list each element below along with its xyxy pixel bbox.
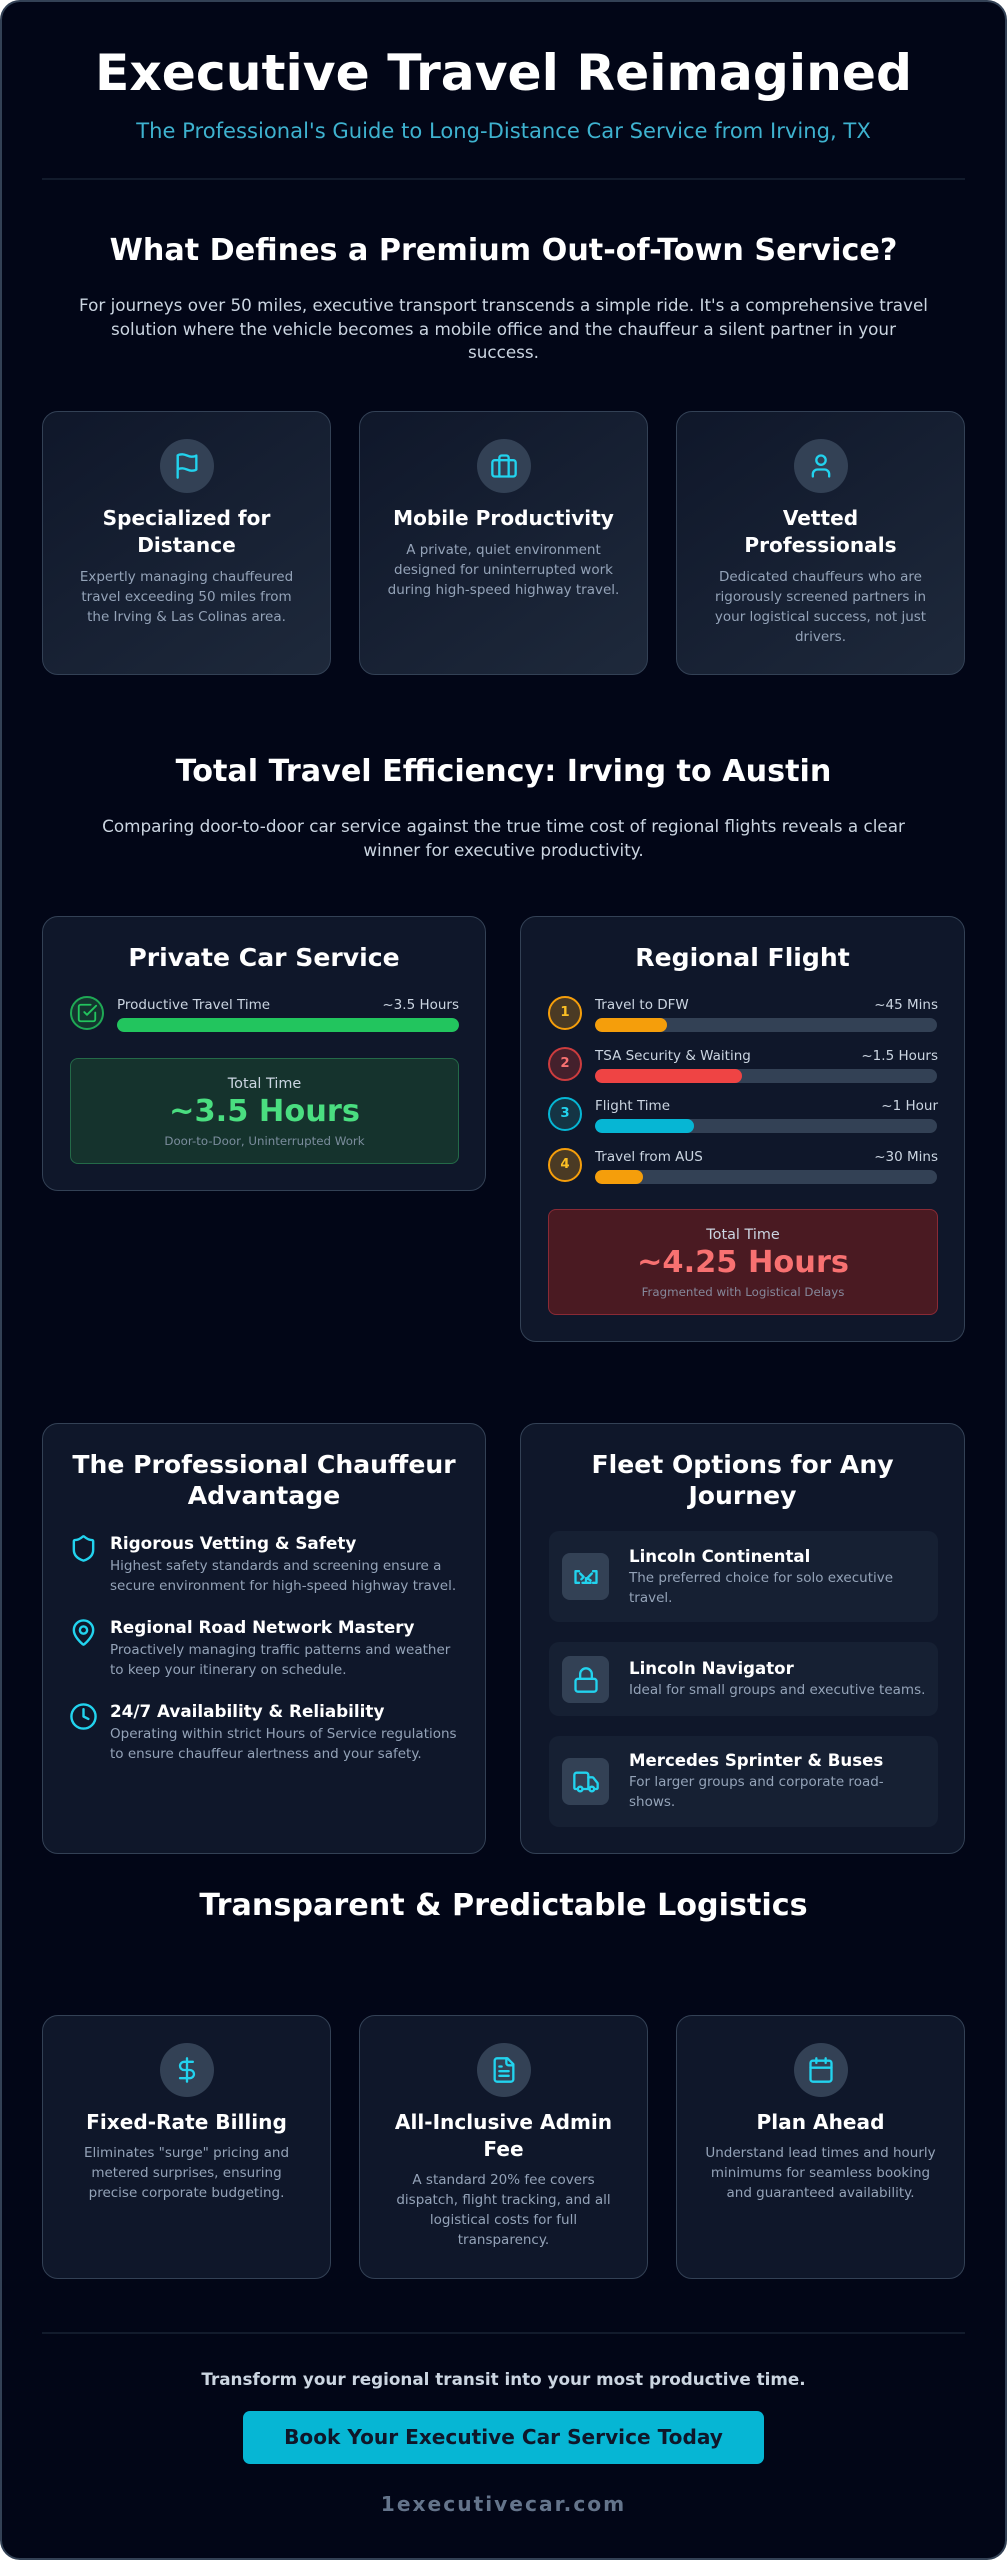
icon: dollar bbox=[160, 2043, 214, 2097]
card text bbox=[84, 2145, 289, 2201]
label: Productive Travel Time bbox=[117, 997, 270, 1013]
panel title bbox=[591, 1450, 894, 1510]
step 1 bbox=[548, 996, 582, 1030]
card text: logistical costs for full bbox=[430, 2212, 577, 2228]
icon: document bbox=[477, 2043, 531, 2097]
website: 1executivecar.com bbox=[381, 2492, 626, 2516]
footer tagline: Transform your regional transit into your most productive time. bbox=[201, 2369, 806, 2389]
card text: Dedicated chauffeurs who are bbox=[719, 569, 922, 585]
panel: fleet options bbox=[520, 1423, 965, 1854]
label: Flight Time bbox=[595, 1098, 670, 1114]
icon: flag bbox=[160, 439, 214, 493]
label: TSA Security & Waiting bbox=[595, 1048, 751, 1064]
card text: drivers. bbox=[795, 629, 846, 645]
card text: A standard 20% fee covers bbox=[412, 2172, 595, 2188]
value: ~3.5 Hours bbox=[169, 1094, 360, 1129]
callout: total time flight bbox=[548, 1209, 938, 1315]
row: travel from AUS bbox=[548, 1148, 938, 1184]
comparison paragraph: winner for executive productivity. bbox=[363, 840, 644, 860]
title: Lincoln Continental bbox=[629, 1547, 810, 1566]
panel: regional flight bbox=[520, 916, 965, 1342]
card text: rigorously screened partners in bbox=[715, 589, 926, 605]
item text bbox=[110, 1726, 457, 1762]
panel title bbox=[72, 1450, 456, 1510]
title: Executive Travel Reimagined bbox=[95, 43, 912, 102]
card text: and guaranteed availability. bbox=[726, 2185, 914, 2201]
panel: admin fee bbox=[359, 2015, 648, 2279]
icon: user bbox=[794, 439, 848, 493]
card title bbox=[103, 506, 270, 557]
item text: to keep your itinerary on schedule. bbox=[110, 1662, 347, 1678]
comparison paragraph: Comparing door-to-door car service against the true time cost of regional flights reveals a clear bbox=[102, 816, 905, 836]
panel title: The Professional Chauffeur bbox=[72, 1450, 456, 1479]
card title: Specialized for bbox=[103, 506, 270, 530]
fleet item: sprinter bbox=[549, 1736, 938, 1827]
callout: total time car bbox=[70, 1058, 459, 1164]
text: shows. bbox=[629, 1794, 675, 1810]
card text: your logistical success, not just bbox=[715, 609, 926, 625]
intro paragraph: For journeys over 50 miles, executive transport transcends a simple ride. It's a comprehensive travel bbox=[79, 295, 928, 315]
card text: dispatch, flight tracking, and all bbox=[396, 2192, 611, 2208]
step 2 bbox=[548, 1046, 582, 1080]
panel: private car service bbox=[42, 916, 486, 1191]
card title: Professionals bbox=[744, 533, 897, 557]
item title: 24/7 Availability & Reliability bbox=[110, 1701, 384, 1721]
bar bbox=[595, 1119, 937, 1133]
card title: Plan Ahead bbox=[757, 2110, 884, 2134]
value: ~30 Mins bbox=[874, 1148, 938, 1164]
step 4 bbox=[548, 1148, 582, 1182]
item text: Highest safety standards and screening ensure a bbox=[110, 1558, 441, 1574]
row: flight time bbox=[548, 1097, 938, 1133]
card text: Eliminates "surge" pricing and bbox=[84, 2145, 289, 2161]
icon: lock bbox=[562, 1656, 609, 1703]
item: vetting bbox=[72, 1533, 456, 1594]
row: productive travel time bbox=[70, 996, 459, 1032]
card title bbox=[395, 2110, 612, 2161]
label: Total Time bbox=[228, 1076, 301, 1092]
value: ~1 Hour bbox=[881, 1098, 938, 1114]
item text bbox=[110, 1558, 456, 1594]
card title: Mobile Productivity bbox=[393, 506, 614, 530]
value: ~45 Mins bbox=[874, 997, 938, 1013]
card text: designed for uninterrupted work bbox=[394, 562, 613, 578]
item text: to ensure chauffeur alertness and your safety. bbox=[110, 1746, 422, 1762]
subtitle: The Professional's Guide to Long-Distance Car Service from Irving, TX bbox=[136, 118, 871, 143]
panel: vetted professionals bbox=[676, 411, 965, 675]
item title: Rigorous Vetting & Safety bbox=[110, 1533, 356, 1553]
label: Travel from AUS bbox=[595, 1148, 703, 1164]
bar bbox=[595, 1170, 937, 1184]
value: ~1.5 Hours bbox=[861, 1048, 938, 1064]
heading: total travel efficiency: Total Travel Efficiency: Irving to Austin bbox=[176, 754, 831, 789]
icon: map pin bbox=[72, 1619, 94, 1646]
panel: mobile productivity bbox=[359, 411, 648, 675]
item: availability bbox=[70, 1701, 457, 1762]
panel: plan ahead bbox=[676, 2015, 965, 2279]
item text: Operating within strict Hours of Service regulations bbox=[110, 1726, 457, 1742]
card title: Distance bbox=[137, 533, 236, 557]
fleet item: continental bbox=[549, 1531, 938, 1622]
panel title: Fleet Options for Any bbox=[591, 1450, 894, 1479]
panel: fixed-rate billing bbox=[42, 2015, 331, 2279]
text: Ideal for small groups and executive teams. bbox=[629, 1682, 925, 1698]
step 3 bbox=[548, 1097, 582, 1131]
progress bar bbox=[117, 1018, 459, 1032]
title: Lincoln Navigator bbox=[629, 1659, 794, 1678]
label: Travel to DFW bbox=[595, 997, 689, 1013]
icon: car bbox=[562, 1553, 609, 1600]
bar bbox=[595, 1068, 937, 1082]
icon: briefcase bbox=[477, 439, 531, 493]
call-to-action button: Book Your Executive Car Service Today bbox=[284, 2425, 723, 2449]
item text bbox=[110, 1642, 450, 1678]
label: Total Time bbox=[706, 1227, 780, 1243]
panel: chauffeur advantage bbox=[42, 1423, 486, 1854]
intro paragraph: solution where the vehicle becomes a mobile office and the chauffeur a silent partner in your bbox=[111, 319, 896, 339]
card title bbox=[744, 506, 897, 557]
card title: Vetted bbox=[783, 506, 858, 530]
panel title: Advantage bbox=[188, 1481, 340, 1510]
value: ~4.25 Hours bbox=[637, 1245, 849, 1280]
item title: Regional Road Network Mastery bbox=[110, 1617, 414, 1637]
card text bbox=[80, 569, 293, 625]
card text: the Irving & Las Colinas area. bbox=[87, 609, 286, 625]
panel title: Regional Flight bbox=[635, 943, 850, 972]
card text: Expertly managing chauffeured bbox=[80, 569, 293, 585]
row: travel to DFW bbox=[548, 996, 938, 1032]
card text: transparency. bbox=[458, 2232, 549, 2248]
text bbox=[629, 1774, 884, 1810]
intro paragraph: success. bbox=[468, 342, 539, 362]
card text: metered surprises, ensuring bbox=[91, 2165, 282, 2181]
step 2: 2 bbox=[560, 1056, 570, 1070]
card text: Understand lead times and hourly bbox=[705, 2145, 936, 2161]
item text: Proactively managing traffic patterns and weather bbox=[110, 1642, 450, 1658]
card text: during high-speed highway travel. bbox=[388, 582, 619, 598]
card title: All-Inclusive Admin bbox=[395, 2110, 612, 2134]
text: The preferred choice for solo executive bbox=[629, 1570, 893, 1586]
card text: travel exceeding 50 miles from bbox=[81, 589, 292, 605]
card text bbox=[715, 569, 926, 645]
item text: secure environment for high-speed highway travel. bbox=[110, 1578, 456, 1594]
note: Fragmented with Logistical Delays bbox=[642, 1285, 844, 1299]
step 1: 1 bbox=[560, 1005, 570, 1020]
heading: logistics: Transparent & Predictable Logistics bbox=[199, 1888, 808, 1923]
intro paragraph bbox=[79, 295, 928, 362]
comparison paragraph bbox=[102, 816, 905, 860]
text: For larger groups and corporate road- bbox=[629, 1774, 884, 1790]
heading: what defines premium: What Defines a Premium Out-of-Town Service? bbox=[110, 233, 897, 268]
icon: check square bbox=[70, 996, 104, 1030]
call-to-action button bbox=[243, 2411, 764, 2464]
card text: minimums for seamless booking bbox=[711, 2165, 930, 2181]
panel title: Private Car Service bbox=[128, 943, 400, 972]
note: Door-to-Door, Uninterrupted Work bbox=[164, 1134, 365, 1148]
icon: calendar bbox=[794, 2043, 848, 2097]
bar bbox=[595, 1018, 937, 1032]
step 3: 3 bbox=[560, 1106, 570, 1121]
card text: A private, quiet environment bbox=[406, 542, 601, 558]
title: Mercedes Sprinter & Buses bbox=[629, 1751, 883, 1770]
fleet item: navigator bbox=[549, 1642, 938, 1716]
icon: clock bbox=[70, 1703, 97, 1730]
icon: shield bbox=[72, 1535, 94, 1562]
step 4: 4 bbox=[560, 1156, 570, 1172]
item: road network bbox=[72, 1617, 450, 1678]
card title: Fee bbox=[483, 2137, 524, 2161]
card text bbox=[388, 542, 619, 598]
value: ~3.5 Hours bbox=[382, 997, 459, 1013]
text: travel. bbox=[629, 1590, 672, 1606]
panel: specialized for distance bbox=[42, 411, 331, 675]
text bbox=[628, 1570, 893, 1606]
row: TSA bbox=[548, 1047, 938, 1083]
icon: truck bbox=[562, 1758, 609, 1805]
card text bbox=[705, 2145, 936, 2201]
panel title: Journey bbox=[688, 1481, 797, 1510]
card title: Fixed-Rate Billing bbox=[86, 2110, 287, 2134]
card text: precise corporate budgeting. bbox=[89, 2185, 284, 2201]
card text bbox=[396, 2172, 611, 2248]
